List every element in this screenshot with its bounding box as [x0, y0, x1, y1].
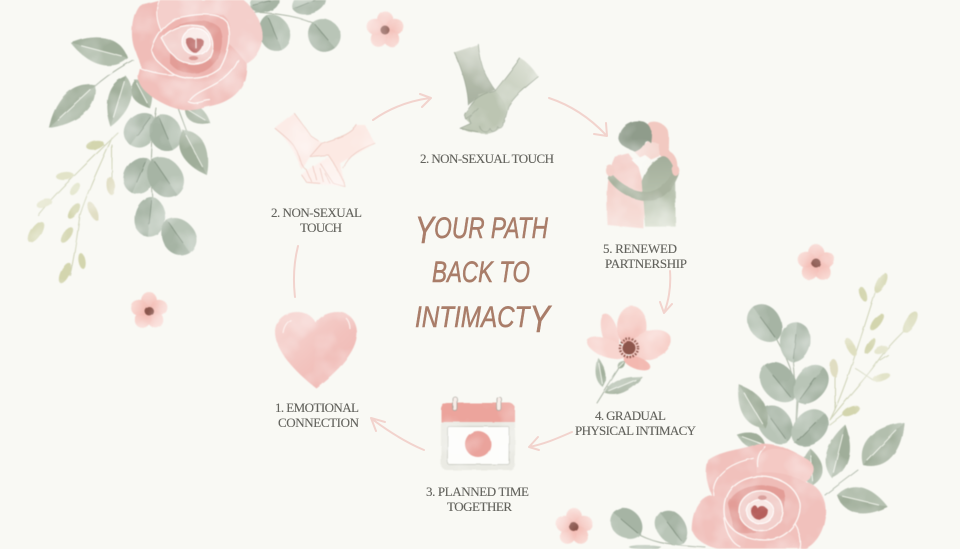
- icon: calendar: [441, 397, 515, 470]
- arrow: touch to partnership: [549, 98, 607, 136]
- label: renewed partnership: 5. RENEWED: [603, 241, 677, 256]
- floral corner: bottom right: [604, 271, 921, 549]
- label: gradual physical intimacy: 4. GRADUAL: [595, 408, 666, 423]
- title: Y: [415, 210, 436, 252]
- label: non-sexual touch: TOUCH: [300, 220, 342, 235]
- step: gradual physical intimacy: [575, 306, 697, 438]
- label: renewed partnership: PARTNERSHIP: [605, 256, 687, 271]
- title: [415, 210, 552, 341]
- arrow: connection to touch: [294, 246, 298, 297]
- label: non-sexual touch: 2. NON-SEXUAL: [271, 205, 362, 220]
- eucalyptus leaves: [40, 0, 347, 262]
- step: green non-sexual touch: [420, 44, 554, 166]
- olive buds: [25, 139, 116, 285]
- rose: bottom right: [692, 444, 826, 549]
- icon: embracing couple: [606, 121, 679, 228]
- floral corner: top left: [25, 0, 347, 285]
- step: pink non-sexual touch: [271, 113, 375, 235]
- arrow: touch to touch: [373, 94, 431, 120]
- label: emotional connection: 1. EMOTIONAL: [275, 400, 359, 415]
- icon: green clasped hands: [454, 44, 538, 134]
- label: non-sexual touch: 2. NON-SEXUAL TOUCH: [420, 151, 554, 166]
- title: INTIMACT: [415, 301, 557, 334]
- olive buds: [829, 271, 921, 418]
- arrow: calendar to connection: [371, 418, 424, 450]
- label: emotional connection: CONNECTION: [278, 415, 360, 430]
- title: Y: [530, 299, 552, 341]
- arrow: intimacy to calendar: [529, 432, 572, 450]
- arrows: [294, 94, 672, 450]
- step: planned time together: [426, 397, 529, 514]
- icon: pink flower: [584, 306, 675, 403]
- label: planned time together: 3. PLANNED TIME: [426, 484, 529, 499]
- icon: pink clasped hands: [275, 113, 375, 187]
- step: emotional connection: [275, 312, 360, 430]
- icon: watercolor heart: [275, 312, 357, 388]
- small blossoms: [128, 11, 837, 547]
- title: OUR PATH: [434, 212, 548, 245]
- label: planned time together: TOGETHER: [447, 499, 512, 514]
- step: renewed partnership: [603, 121, 687, 271]
- label: gradual physical intimacy: PHYSICAL INTIMACY: [575, 423, 697, 438]
- rose: top left: [132, 0, 263, 110]
- eucalyptus leaves: [604, 298, 915, 549]
- title: BACK TO: [432, 256, 530, 289]
- arrow: partnership to flower: [660, 271, 672, 313]
